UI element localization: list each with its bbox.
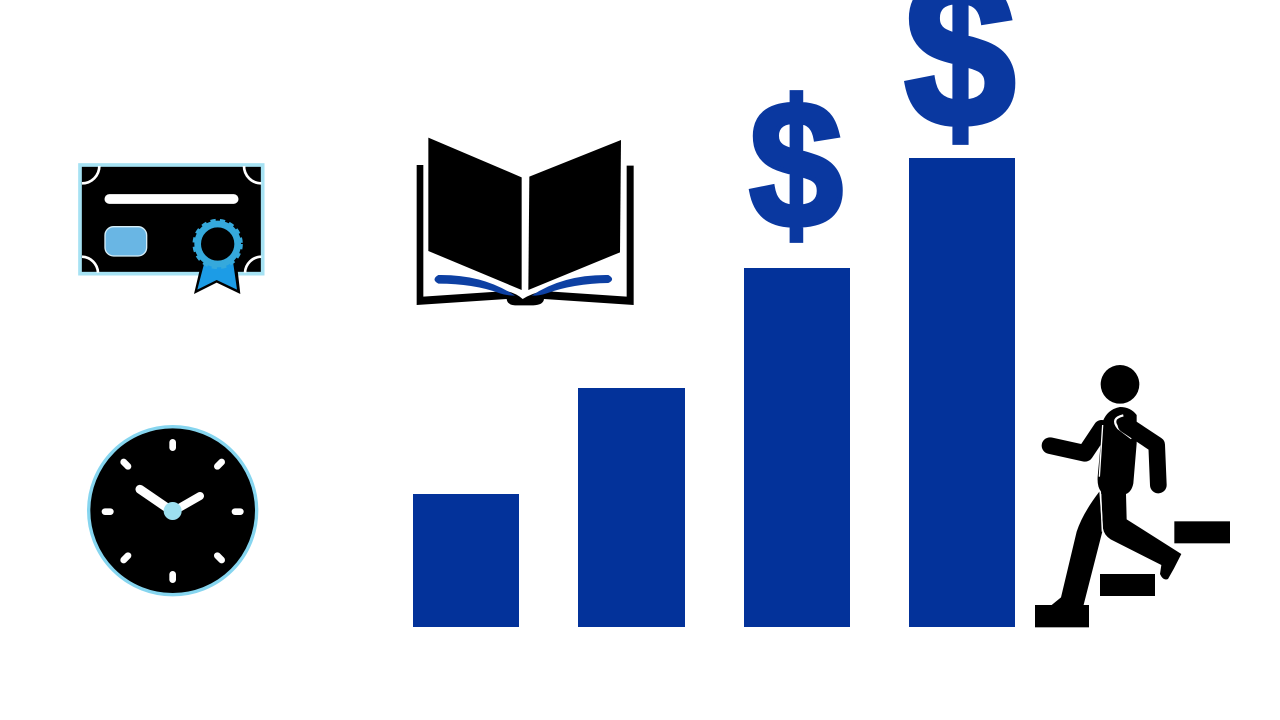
bar 1 xyxy=(413,494,519,627)
icon: person climbing stairs xyxy=(1035,365,1230,627)
icon: certificate xyxy=(80,165,263,294)
bar 2 xyxy=(578,388,685,627)
bar 4 xyxy=(909,158,1015,627)
icon: clock xyxy=(89,427,257,595)
bar chart xyxy=(413,158,1015,627)
bar 3 xyxy=(744,268,850,627)
icon: open book xyxy=(417,138,634,305)
icon: dollar sign small: $ xyxy=(749,64,843,266)
